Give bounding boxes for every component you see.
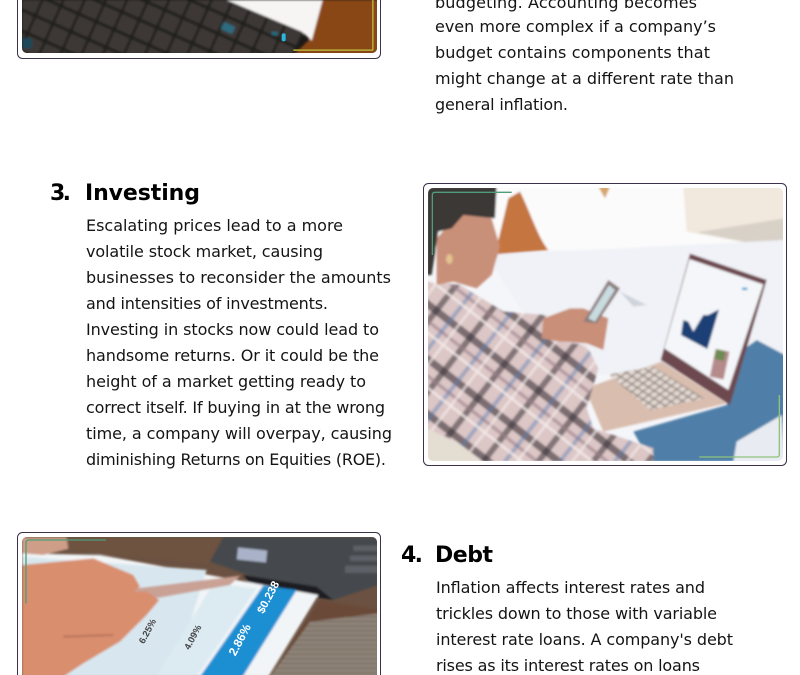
report figures [137,580,282,658]
hand [22,558,159,675]
paragraph: investing: Investing in stocks now could lead to [86,320,379,339]
shirt [427,282,653,462]
paragraph: investing: and intensities of investments. [86,294,328,313]
heading: 4. Debt [401,543,493,568]
photo: keyboard and paper on wooden desk [18,0,380,58]
paragraph: debt: rises as its interest rates on loans [436,656,700,675]
report figures: 6.25% [137,617,159,645]
paragraph: budgeting continued: might change at a different rate than [435,69,734,88]
accent line: green corner [26,540,106,603]
paragraph: budgeting continued: general inflation. [435,95,568,114]
heading: 3. Investing: 3. [50,181,71,206]
jeans [633,340,785,462]
heading: 4. Debt: Debt [435,543,493,568]
photo: hand with pen pointing at financial report [18,532,380,675]
heading: 3. Investing: Investing [85,181,200,206]
photo frame [18,0,380,58]
background wall [434,188,610,251]
paragraph: investing: diminishing Returns on Equities (ROE). [86,450,386,469]
report figures: 2.86% [226,621,254,658]
heading: 4. Debt: 4. [401,543,423,568]
paragraph: debt: Inflation affects interest rates and [436,578,705,597]
paragraph: investing: businesses to reconsider the amounts [86,268,391,287]
paragraph: investing: height of a market getting ready to [86,372,366,391]
paragraph: investing: Escalating prices lead to a more [86,216,343,235]
photo: woman with phone and laptop [424,184,786,466]
photo frame [424,184,786,466]
pen [133,574,241,600]
paragraph: investing: correct itself. If buying in at the wrong [86,398,385,417]
report figures: $0.238 [255,580,282,616]
paragraph: investing: time, a company will overpay, causing [86,424,392,443]
head [437,212,500,288]
laptop [585,362,727,432]
accent line: green corners [432,192,512,255]
paragraph: debt: trickles down to those with variable [436,604,717,623]
paragraph: investing: volatile stock market, causing [86,242,323,261]
paragraph: investing: handsome returns. Or it could be the [86,346,379,365]
paragraph: investing [86,216,392,469]
hands and phone [542,308,608,350]
paragraph: debt: interest rate loans. A company's debt [436,630,733,649]
paragraph: budgeting continued: even more complex if a company’s [435,17,716,36]
paragraph: budgeting continued [435,0,734,114]
photo frame [18,532,380,675]
paragraph: budgeting continued: budget contains components that [435,43,710,62]
report figures: 4.09% [182,623,204,651]
paragraph: debt [436,578,733,675]
